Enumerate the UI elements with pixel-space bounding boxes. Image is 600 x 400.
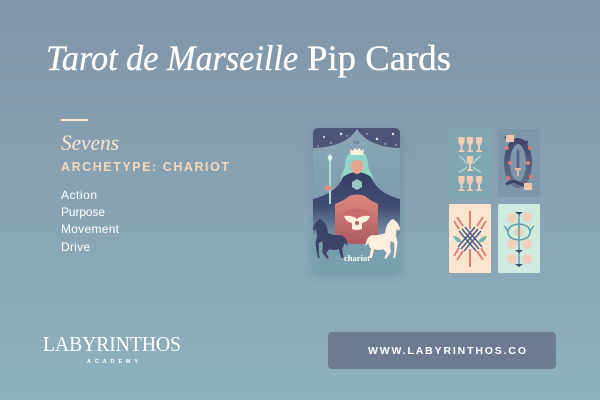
keyword list: Action xyxy=(61,188,97,202)
hair xyxy=(341,151,373,182)
keyword list: Purpose xyxy=(61,205,105,219)
dark horse xyxy=(313,219,348,259)
pip card: seven of swords xyxy=(498,129,540,197)
pip card: seven of cups xyxy=(449,129,491,197)
brooch xyxy=(352,179,362,190)
light horse xyxy=(365,219,400,259)
tarot card: chariot xyxy=(311,128,402,277)
logo: Labyrinthos Academy: LABYRINTHOS xyxy=(43,332,181,356)
winged emblem xyxy=(344,216,370,230)
keyword list: Drive xyxy=(61,240,90,254)
button: website url: WWW.LABYRINTHOS.CO xyxy=(368,345,526,357)
panel: archetype text xyxy=(61,119,229,254)
heading: Sevens: Sevens xyxy=(61,130,119,155)
crown xyxy=(350,148,364,155)
title: Tarot de Marseille xyxy=(46,38,298,78)
title: Pip Cards xyxy=(307,38,451,78)
keyword list: Movement xyxy=(61,222,120,236)
title xyxy=(46,38,451,78)
numeral: VII xyxy=(353,140,360,145)
button: website url xyxy=(328,332,556,369)
logo: Labyrinthos Academy: ACADEMY xyxy=(87,359,138,365)
face xyxy=(351,158,363,174)
pip card: seven of wands xyxy=(449,204,491,273)
scepter xyxy=(329,160,331,204)
logo: Labyrinthos Academy xyxy=(43,332,181,365)
robe xyxy=(313,172,400,239)
shield xyxy=(335,194,378,244)
card label: chariot xyxy=(344,253,370,263)
subheading: archetype: ARCHETYPE: CHARIOT xyxy=(61,160,229,174)
keyword list xyxy=(61,188,120,254)
starry curtain xyxy=(313,128,400,148)
pip card: seven of coins xyxy=(498,204,540,273)
